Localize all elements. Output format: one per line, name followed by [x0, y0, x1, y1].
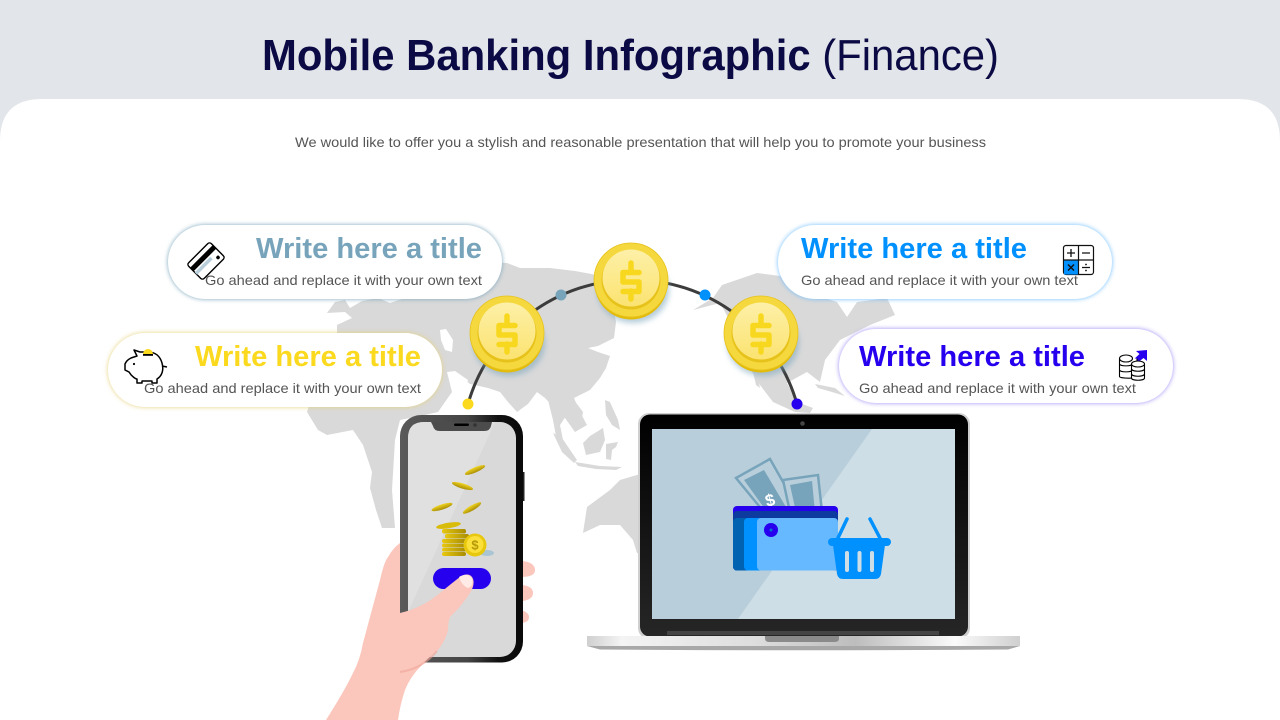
icon: calculator: [1064, 246, 1094, 274]
coin left: [470, 296, 545, 376]
dot: purple: [792, 398, 802, 410]
card: yellow: [108, 333, 442, 407]
world map: [307, 262, 895, 555]
icon: piggy bank: [125, 349, 167, 383]
title: Mobile Banking Infographic (Finance): [262, 31, 999, 80]
icon: wallet: [733, 506, 838, 570]
coin right: [724, 296, 799, 376]
phone: [400, 415, 524, 662]
header band: [0, 0, 1280, 140]
coin stack: [436, 521, 469, 556]
hand with thumb: [326, 543, 474, 720]
card: steel blue: [168, 225, 502, 299]
laptop: [587, 413, 1020, 650]
thumbnail: [459, 575, 472, 588]
phone notch: [431, 422, 492, 431]
dollar coin: $: [471, 538, 479, 552]
card text: Go ahead and replace it with your own text: [205, 272, 482, 288]
dollar coin: [464, 534, 494, 556]
dot: steel blue: [556, 290, 566, 300]
dot: bright blue: [700, 290, 710, 300]
coin centre: [594, 243, 669, 323]
card text: Go ahead and replace it with your own text: [144, 380, 421, 396]
card title: Write here a title: [195, 341, 421, 373]
icon: coin stacks with arrow: [1120, 350, 1147, 380]
blue button: [433, 568, 491, 589]
hand fingers behind phone: [520, 561, 535, 623]
falling coins: [431, 463, 486, 516]
icon: shopping basket: [828, 519, 891, 579]
card title: Write here a title: [256, 233, 482, 265]
dot: yellow: [462, 398, 474, 410]
subtitle: We would like to offer you a stylish and reasonable presentation that will help you to promote your business: [295, 134, 986, 150]
card title: Write here a title: [801, 233, 1027, 265]
icon: cash bills: [736, 459, 822, 512]
card text: Go ahead and replace it with your own text: [859, 380, 1136, 396]
laptop base: [587, 636, 1020, 650]
connection arc: [468, 280, 797, 404]
icon: cash bills: $: [763, 490, 778, 511]
card: bright blue: [778, 225, 1112, 299]
icon: credit card: [187, 242, 225, 280]
card title: Write here a title: [859, 341, 1085, 373]
card text: Go ahead and replace it with your own text: [801, 272, 1078, 288]
card: purple: [839, 329, 1173, 403]
